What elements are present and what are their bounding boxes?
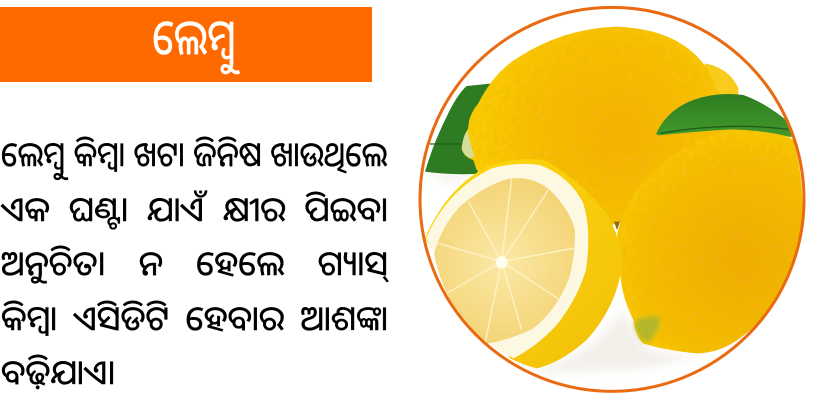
body text xyxy=(0,136,389,392)
left leaf xyxy=(425,83,493,174)
lemon tip xyxy=(634,316,660,343)
body text: କିମ୍ବା ଏସିଡିଟି ହେବାର ଆଶଙ୍କା xyxy=(1,300,388,338)
cut lemon xyxy=(425,159,622,368)
right lemon xyxy=(617,128,802,353)
shadow under the lemons xyxy=(440,174,682,374)
body text: ବଢ଼ିଯାଏ। xyxy=(1,354,116,392)
lemon segments xyxy=(438,178,573,343)
title banner: ଲେମ୍ବୁ xyxy=(152,11,236,65)
body text: ଲେମ୍ବୁ କିମ୍ବା ଖଟା ଜିନିଷ ଖାଉଥିଲେ xyxy=(1,136,388,174)
body text: ଏକ ଘଣ୍ଟା ଯାଏଁ କ୍ଷୀର ପିଇବା xyxy=(1,190,388,228)
circular lemon illustration xyxy=(418,6,806,393)
body text: ଅନୁଚିତ। ନ ହେଲେ ଗ୍ୟାସ୍ xyxy=(1,245,388,283)
title banner xyxy=(0,7,372,82)
orange ring xyxy=(420,7,804,391)
right leaf xyxy=(656,94,792,137)
back lemon xyxy=(462,27,743,230)
